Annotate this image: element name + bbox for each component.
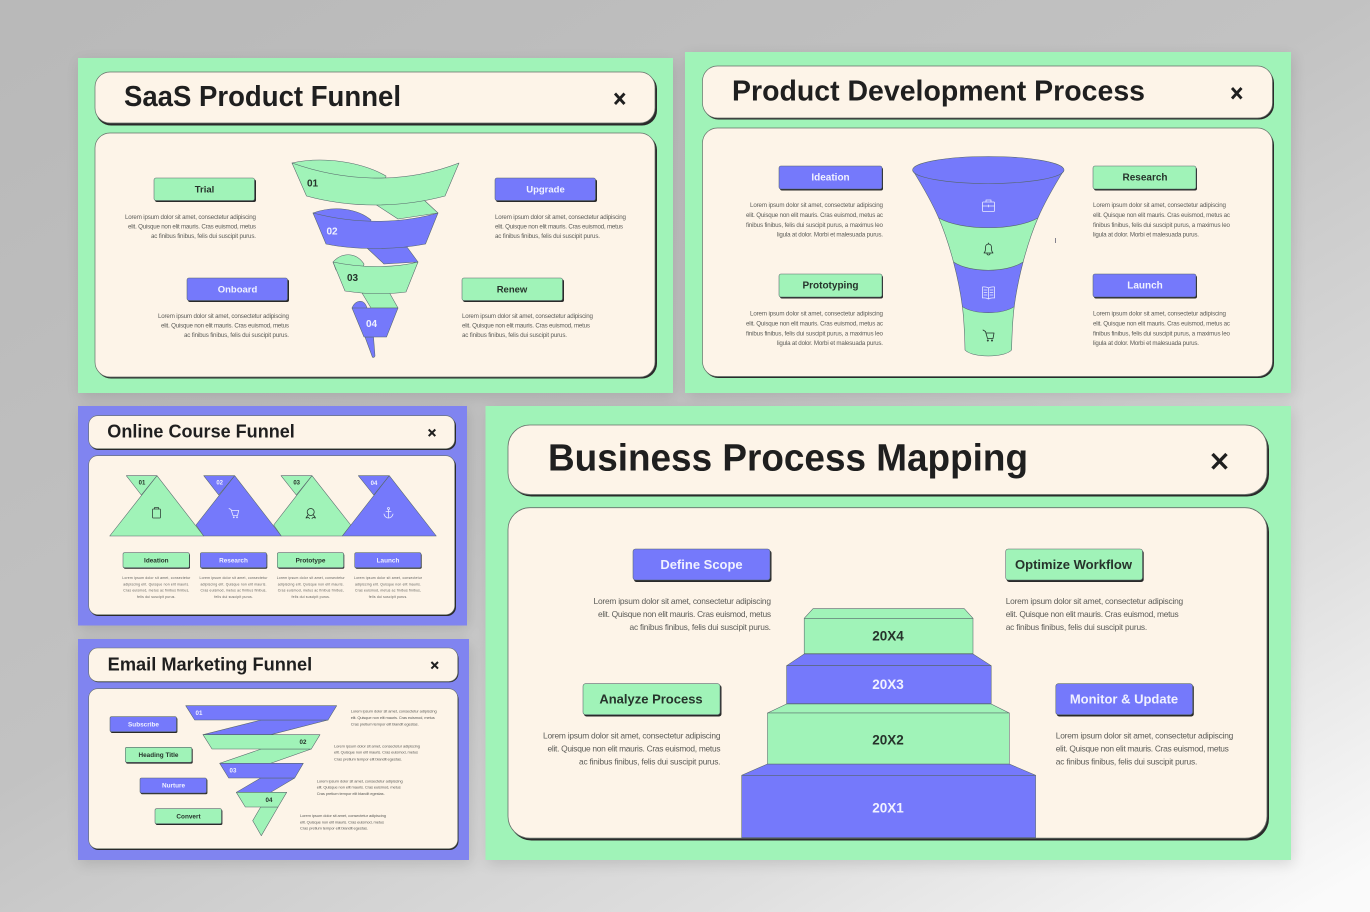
small mark xyxy=(1054,238,1057,243)
step column: Ideation xyxy=(122,553,191,599)
text: Prototyping: finibus finibus, felis dui suscipit purus, a maximus leo xyxy=(746,330,884,338)
text: Monitor & Update: elit. Quisque non elit mauris. Cras euismod, metus xyxy=(1056,744,1229,754)
text: step 4 xyxy=(300,813,386,831)
icon: briefcase xyxy=(982,200,994,212)
button: Subscribe xyxy=(110,717,177,733)
text: Prototyping: elit. Quisque non elit mauris. Cras euismod, metus ac xyxy=(746,320,883,328)
text: Upgrade: elit. Quisque non elit mauris. Cras euismod, metus xyxy=(495,224,623,230)
text: Ideation: finibus finibus, felis dui suscipit purus, a maximus leo xyxy=(746,222,884,229)
button: Define Scope xyxy=(633,549,772,582)
icon: cart xyxy=(983,330,994,341)
button: Heading Title: Heading Title xyxy=(138,752,179,759)
text: Launch xyxy=(1093,310,1231,347)
text: Prototyping: Lorem ipsum dolor sit amet, consectetur adipiscing xyxy=(750,310,884,318)
step column: Launch: Launch xyxy=(377,558,399,564)
text: Trial xyxy=(125,214,257,240)
icon: close xyxy=(1212,454,1226,468)
button: Heading Title xyxy=(125,747,193,764)
button: Nurture xyxy=(140,778,207,794)
button: Prototyping: Prototyping xyxy=(802,280,859,292)
text: Research: elit. Quisque non elit mauris. Cras euismod, metus ac xyxy=(1093,212,1230,219)
button: Convert: Convert xyxy=(176,813,201,820)
panel: SaaS Product Funnel xyxy=(78,58,673,393)
step column: Prototype: Cras euismod, metus ac finibus finibus, xyxy=(278,588,344,592)
triangle step 1 xyxy=(110,476,204,536)
text: step 4: elit. Quisque non elit mauris. Cras euismod, metus xyxy=(300,819,384,824)
step column: Research: felis dui suscipit purus. xyxy=(214,595,253,599)
text: Monitor & Update xyxy=(1056,731,1234,767)
text: Renew: ac finibus finibus, felis dui suscipit purus. xyxy=(462,332,567,339)
title: Product Development Process xyxy=(732,76,1145,108)
button: Trial xyxy=(154,178,256,202)
button: Prototyping xyxy=(779,274,883,298)
button: Define Scope: Define Scope xyxy=(660,557,743,572)
icon: close xyxy=(429,430,435,436)
text: Research: Lorem ipsum dolor sit amet, consectetur adipiscing xyxy=(1093,202,1227,209)
button: Optimize Workflow xyxy=(1006,549,1144,582)
triangle step 2 xyxy=(196,476,281,536)
title: Email Marketing Funnel xyxy=(108,655,312,675)
button: Trial: Trial xyxy=(195,184,214,196)
text: Renew xyxy=(462,313,594,339)
icon: close xyxy=(615,94,624,104)
funnel numbers: 04 xyxy=(366,319,378,330)
text: Ideation: elit. Quisque non elit mauris. Cras euismod, metus ac xyxy=(746,212,883,219)
text: Onboard: elit. Quisque non elit mauris. Cras euismod, metus xyxy=(161,322,289,330)
text: step 1: elit. Quisque non elit mauris. Cras euismod, metus xyxy=(351,715,435,720)
text: Optimize Workflow: elit. Quisque non elit mauris. Cras euismod, metus xyxy=(1006,609,1179,619)
content card xyxy=(89,689,458,850)
icon: cart xyxy=(229,508,239,518)
step column: Prototype: Lorem ipsum dolor sit amet, consectetur xyxy=(277,576,346,580)
button: Ideation: Ideation xyxy=(811,172,850,184)
step column: Research: Lorem ipsum dolor sit amet, consectetur xyxy=(200,576,268,580)
text: Upgrade: ac finibus finibus, felis dui suscipit purus. xyxy=(495,233,600,240)
text: step 3 xyxy=(317,778,403,796)
text: step 1: Lorem ipsum dolor sit amet, consectetur adipiscing xyxy=(351,708,437,714)
step column: Research: adipiscing elit. Quisque non elit mauris. xyxy=(200,582,267,586)
button: Renew xyxy=(462,278,564,302)
header bar xyxy=(95,72,657,126)
button: Research xyxy=(1093,166,1197,190)
header bar xyxy=(508,425,1269,496)
icon: clipboard xyxy=(152,508,160,518)
text: Research: ligula at dolor. Morbi et malesuada purus. xyxy=(1093,232,1199,238)
funnel numbers: 04 xyxy=(266,797,273,804)
funnel numbers: 02 xyxy=(326,226,338,238)
triangle step 2: 02 xyxy=(216,480,224,486)
step 20X3: 20X3 xyxy=(872,677,904,692)
panel: Product Development Process xyxy=(685,52,1291,393)
step column: Launch: Lorem ipsum dolor sit amet, consectetur xyxy=(354,576,423,580)
text: Define Scope: ac finibus finibus, felis dui suscipit purus. xyxy=(630,622,771,632)
icon: close xyxy=(431,662,438,669)
funnel numbers: 01 xyxy=(196,710,203,717)
content card xyxy=(95,133,657,378)
button: Renew: Renew xyxy=(497,284,528,296)
text: step 3: Cras pretium tempor elit blandit egestas. xyxy=(317,791,385,796)
button: Upgrade: Upgrade xyxy=(526,184,565,196)
text: Define Scope: elit. Quisque non elit mauris. Cras euismod, metus xyxy=(598,609,771,619)
text: Define Scope: Lorem ipsum dolor sit amet, consectetur adipiscing xyxy=(594,596,771,606)
button: Nurture: Nurture xyxy=(162,783,185,790)
funnel numbers: 03 xyxy=(347,273,359,284)
step column: Prototype xyxy=(277,553,346,599)
funnel numbers: 02 xyxy=(300,739,307,746)
text: Launch: elit. Quisque non elit mauris. Cras euismod, metus ac xyxy=(1093,320,1230,328)
text: Optimize Workflow xyxy=(1006,596,1184,632)
text: Upgrade xyxy=(495,214,627,240)
button: Launch xyxy=(1093,274,1197,298)
funnel numbers xyxy=(196,710,307,804)
step column: Launch: felis dui suscipit purus. xyxy=(369,595,407,599)
text: Launch: Lorem ipsum dolor sit amet, consectetur adipiscing xyxy=(1093,310,1227,318)
panel: Business Process Mapping xyxy=(486,406,1291,860)
zigzag funnel xyxy=(186,706,337,836)
text: Trial: ac finibus finibus, felis dui suscipit purus. xyxy=(151,233,256,240)
step column: Research xyxy=(200,553,268,599)
text: Onboard: Lorem ipsum dolor sit amet, consectetur adipiscing xyxy=(158,313,290,320)
step column: Launch: adipiscing elit. Quisque non elit mauris. xyxy=(355,582,421,586)
text: Trial: elit. Quisque non elit mauris. Cras euismod, metus xyxy=(128,224,256,230)
panel: Email Marketing Funnel xyxy=(78,639,469,860)
button: Analyze Process: Analyze Process xyxy=(599,692,703,706)
funnel numbers: 01 xyxy=(307,178,319,190)
button: Launch: Launch xyxy=(1127,280,1163,292)
triangle step 4: 04 xyxy=(371,481,378,487)
text: Ideation: Lorem ipsum dolor sit amet, consectetur adipiscing xyxy=(750,202,884,209)
text: step 2: elit. Quisque non elit mauris. Cras euismod, metus xyxy=(334,750,418,755)
header bar xyxy=(702,66,1274,120)
triangle step 3 xyxy=(274,476,351,536)
text: Monitor & Update: Lorem ipsum dolor sit amet, consectetur adipiscing xyxy=(1056,731,1234,741)
step 20X2: 20X2 xyxy=(872,732,904,748)
title: Business Process Mapping xyxy=(548,438,1028,480)
text: Analyze Process: ac finibus finibus, felis dui suscipit purus. xyxy=(579,757,720,767)
button: Convert xyxy=(155,809,222,825)
text: Analyze Process: elit. Quisque non elit mauris. Cras euismod, metus xyxy=(548,744,720,754)
text: Optimize Workflow: ac finibus finibus, felis dui suscipit purus. xyxy=(1006,622,1147,632)
text: Prototyping: ligula at dolor. Morbi et malesuada purus. xyxy=(777,340,883,347)
triangle step 1: 01 xyxy=(139,480,146,486)
text: Research: finibus finibus, felis dui suscipit purus, a maximus leo xyxy=(1093,222,1231,229)
text: Prototyping xyxy=(746,310,884,347)
text: step 3: elit. Quisque non elit mauris. Cras euismod, metus xyxy=(317,785,401,790)
text: step 2: Lorem ipsum dolor sit amet, consectetur adipiscing xyxy=(334,744,420,748)
text: Research xyxy=(1093,202,1231,238)
step column: Launch: Cras euismod, metus ac finibus finibus, xyxy=(355,588,421,592)
text: Launch: ligula at dolor. Morbi et malesuada purus. xyxy=(1093,340,1199,347)
step 20X3 xyxy=(787,654,991,704)
button: Onboard xyxy=(187,278,289,302)
text: Ideation xyxy=(746,202,884,238)
step 20X4 xyxy=(804,609,973,654)
text: Monitor & Update: ac finibus finibus, felis dui suscipit purus. xyxy=(1056,757,1197,767)
text: step 1: Cras pretium tempor elit blandit egestas. xyxy=(351,721,419,726)
step 20X4: 20X4 xyxy=(872,628,904,644)
step column: Launch xyxy=(354,553,423,599)
step column: Prototype: felis dui suscipit purus. xyxy=(292,595,330,599)
button: Optimize Workflow: Optimize Workflow xyxy=(1015,557,1133,572)
icon: ribbon badge xyxy=(306,508,316,518)
funnel numbers: 03 xyxy=(230,767,237,774)
text: step 2: Cras pretium tempor elit blandit egestas. xyxy=(334,756,402,761)
text: step 4: Lorem ipsum dolor sit amet, consectetur adipiscing xyxy=(300,813,386,818)
title: Online Course Funnel xyxy=(107,422,295,442)
text: Analyze Process: Lorem ipsum dolor sit amet, consectetur adipiscing xyxy=(543,731,721,741)
text: step 4: Cras pretium tempor elit blandit egestas. xyxy=(300,826,368,831)
text: Ideation: ligula at dolor. Morbi et malesuada purus. xyxy=(777,232,883,238)
button: Monitor & Update: Monitor & Update xyxy=(1070,692,1178,706)
step 20X1: 20X1 xyxy=(872,800,904,816)
text: Analyze Process xyxy=(543,731,721,767)
text: Onboard: ac finibus finibus, felis dui suscipit purus. xyxy=(184,332,289,339)
button: Subscribe: Subscribe xyxy=(128,722,159,728)
text: Optimize Workflow: Lorem ipsum dolor sit amet, consectetur adipiscing xyxy=(1006,596,1184,606)
step column: Ideation: Cras euismod, metus ac finibus finibus, xyxy=(123,588,189,592)
step column: Ideation: felis dui suscipit purus. xyxy=(137,595,176,599)
step column: Ideation: Lorem ipsum dolor sit amet, consectetur xyxy=(122,576,191,580)
content card xyxy=(702,128,1274,378)
ribbon funnel xyxy=(292,160,459,358)
step 20X2 xyxy=(768,704,1009,764)
text: Define Scope xyxy=(594,596,771,632)
icon: close xyxy=(1232,88,1242,98)
triangle step 4 xyxy=(342,476,436,536)
icon: book xyxy=(982,287,994,299)
text: step 2 xyxy=(334,744,420,761)
text: Launch: finibus finibus, felis dui suscipit purus, a maximus leo xyxy=(1093,330,1231,338)
icon: anchor xyxy=(384,508,393,518)
text: Trial: Lorem ipsum dolor sit amet, consectetur adipiscing xyxy=(125,214,257,221)
button: Upgrade xyxy=(495,178,597,202)
step column: Prototype: Prototype xyxy=(296,558,326,564)
step 20X1 xyxy=(742,764,1036,838)
step column: Ideation: Ideation xyxy=(144,558,169,564)
step column: Prototype: adipiscing elit. Quisque non elit mauris. xyxy=(278,582,344,586)
button: Research: Research xyxy=(1122,172,1168,184)
step column: Research: Cras euismod, metus ac finibus finibus, xyxy=(200,588,267,592)
content card xyxy=(508,508,1269,840)
text: Renew: Lorem ipsum dolor sit amet, consectetur adipiscing xyxy=(462,313,594,320)
text: Renew: elit. Quisque non elit mauris. Cras euismod, metus xyxy=(462,322,590,330)
stair pyramid xyxy=(742,609,1036,838)
text: step 3: Lorem ipsum dolor sit amet, consectetur adipiscing xyxy=(317,778,403,783)
button: Onboard: Onboard xyxy=(218,284,257,296)
panel: Online Course Funnel xyxy=(78,406,467,626)
icon: bell xyxy=(984,243,993,255)
content card xyxy=(89,456,456,616)
funnel numbers xyxy=(307,178,378,330)
button: Analyze Process xyxy=(583,684,722,716)
text: Onboard xyxy=(158,313,290,339)
button: Ideation xyxy=(779,166,883,190)
button: Monitor & Update xyxy=(1056,684,1194,716)
header bar xyxy=(89,648,458,682)
step column: Ideation: adipiscing elit. Quisque non elit mauris. xyxy=(123,582,189,586)
header bar xyxy=(89,416,456,450)
text: Upgrade: Lorem ipsum dolor sit amet, consectetur adipiscing xyxy=(495,214,627,221)
title: SaaS Product Funnel xyxy=(124,81,401,113)
text: step 1 xyxy=(351,708,437,726)
triangle step 3: 03 xyxy=(293,480,301,486)
funnel xyxy=(913,156,1064,356)
step column: Research: Research xyxy=(219,558,248,564)
